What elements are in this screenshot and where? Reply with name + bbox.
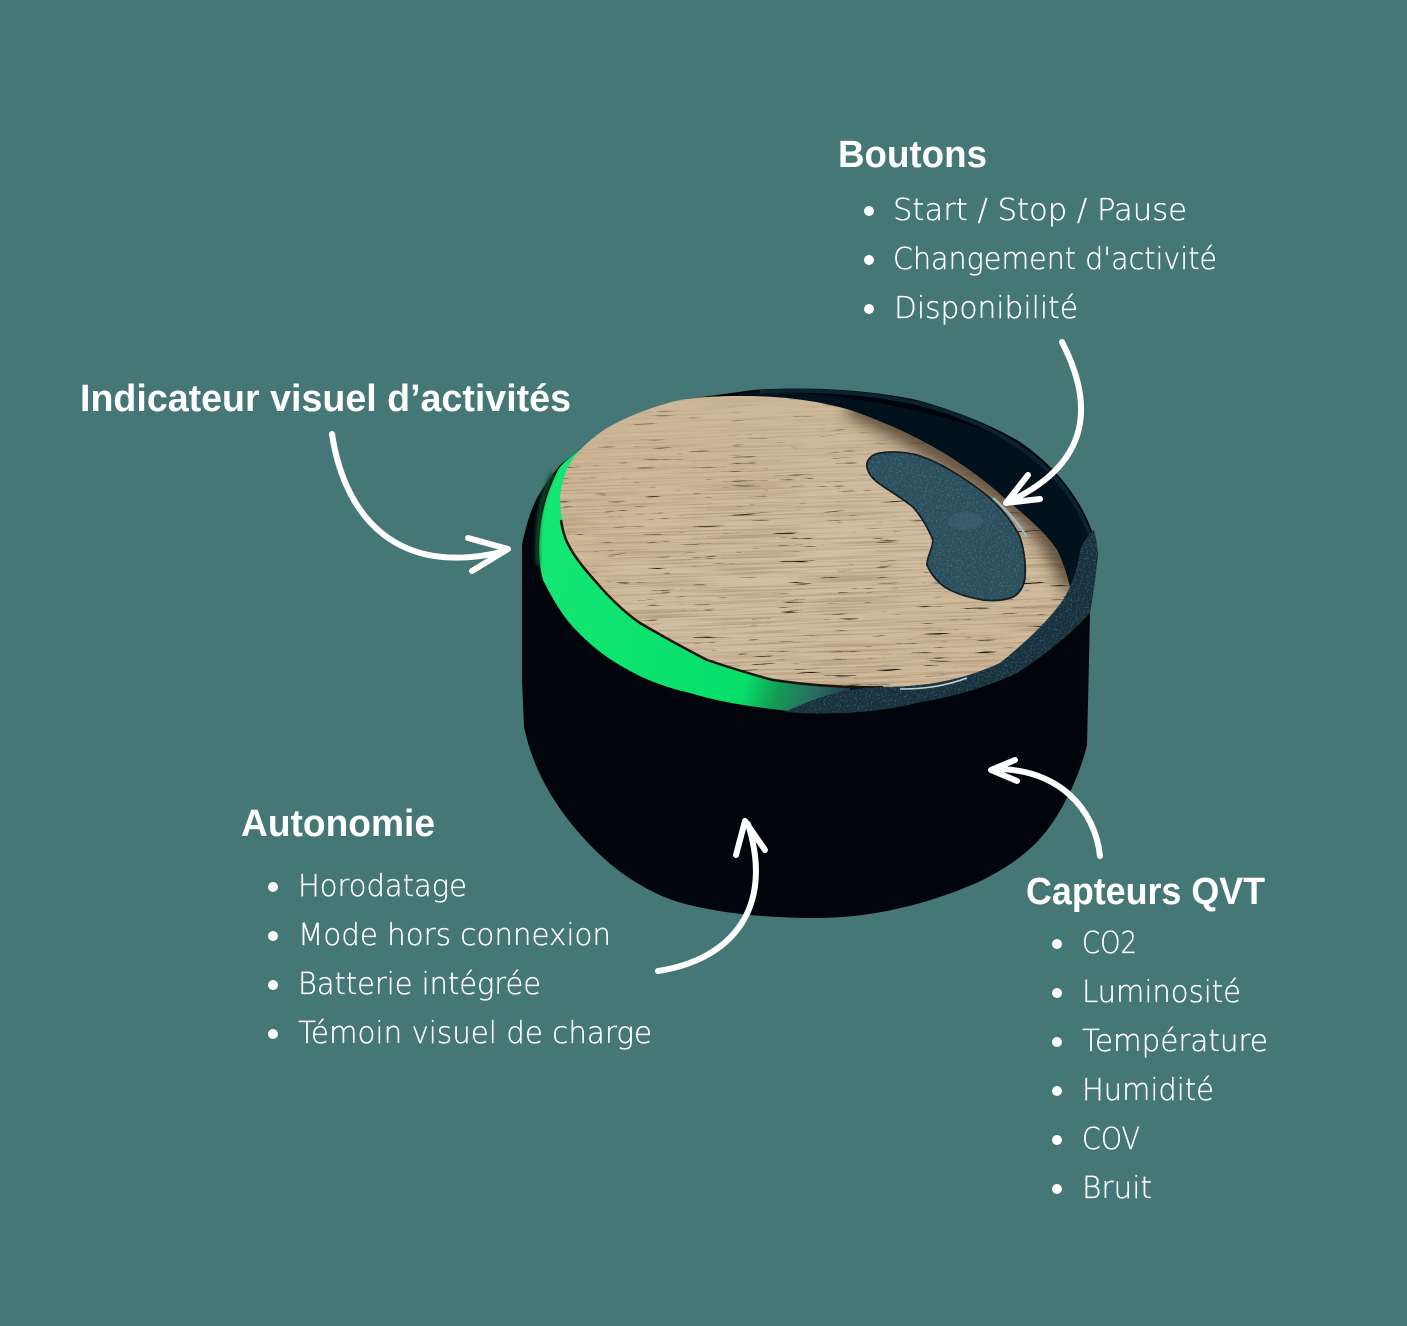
heading: Boutons: Boutons bbox=[838, 134, 987, 176]
list: Autonomie: Témoin visuel de charge bbox=[298, 1016, 652, 1051]
list: Capteurs QVT: Bruit bbox=[1082, 1171, 1152, 1206]
device body bbox=[522, 388, 1098, 918]
list: Boutons: Start / Stop / Pause bbox=[893, 193, 1187, 228]
list: Capteurs QVT: Humidité bbox=[1082, 1073, 1214, 1108]
arrow: Autonomie bbox=[658, 821, 765, 971]
list: Boutons: Disponibilité bbox=[894, 291, 1078, 326]
wood lower edge bbox=[561, 520, 883, 687]
list: Autonomie: Batterie intégrée bbox=[298, 967, 541, 1002]
list: Capteurs QVT bbox=[1052, 926, 1268, 1206]
textured rim bbox=[780, 525, 1102, 720]
arrow: Capteurs QVT bbox=[991, 760, 1100, 856]
list: Boutons bbox=[864, 193, 1217, 326]
button embossed logo bbox=[949, 512, 983, 530]
arrow: Boutons bbox=[1006, 342, 1081, 503]
heading: Capteurs QVT: Capteurs QVT bbox=[1026, 871, 1265, 913]
list: Capteurs QVT: Température bbox=[1082, 1024, 1268, 1059]
wood top bbox=[560, 396, 1070, 687]
list: Autonomie: Horodatage bbox=[298, 869, 467, 904]
list: Capteurs QVT: Luminosité bbox=[1082, 975, 1241, 1010]
button pad bbox=[860, 448, 1030, 604]
inner recess bbox=[560, 392, 1090, 700]
green activity light bbox=[539, 448, 850, 713]
list: Boutons: Changement d'activité bbox=[893, 242, 1217, 277]
rim highlight bbox=[900, 678, 967, 689]
green left shade bbox=[537, 473, 553, 565]
top rim bbox=[760, 391, 1094, 548]
list: Autonomie: Mode hors connexion bbox=[298, 918, 611, 953]
button light edge bbox=[993, 498, 1027, 537]
list: Capteurs QVT: CO2 bbox=[1082, 926, 1137, 961]
list: Autonomie bbox=[268, 869, 652, 1051]
heading: Indicateur visuel d'activités: Indicateur visuel d’activités bbox=[80, 378, 571, 420]
arrow: Indicateur bbox=[332, 434, 508, 571]
device: round sensor box bbox=[522, 388, 1098, 918]
heading: Autonomie: Autonomie bbox=[241, 803, 435, 845]
list: Capteurs QVT: COV bbox=[1082, 1122, 1140, 1157]
